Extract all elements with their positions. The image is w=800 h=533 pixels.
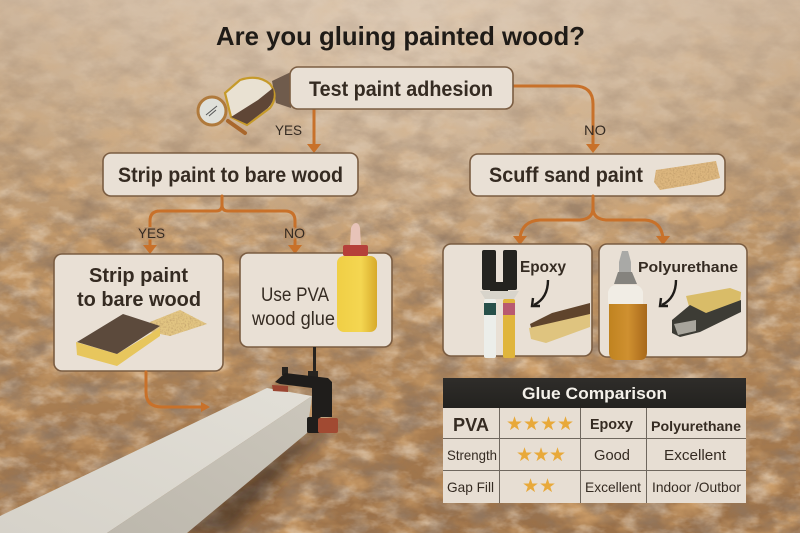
icon: magnifier and peeled paint swatch: [198, 72, 291, 133]
table header: Glue Comparison: [522, 384, 667, 403]
panel: epoxy: [443, 244, 592, 358]
panel: polyurethane: Polyurethane: [638, 259, 738, 276]
label: yes (strip): YES: [138, 225, 165, 241]
icon: curved pointer arrow: [532, 280, 548, 306]
row: gap fill: ★★: [522, 476, 556, 497]
label: no (test): NO: [584, 122, 606, 138]
panel: polyurethane: [599, 244, 747, 360]
row: gap fill: Excellent: [585, 479, 641, 495]
board: white painted wood: [0, 388, 312, 533]
table: glue comparison: [443, 378, 746, 503]
table header: [443, 378, 746, 408]
arrow: strip panel to board: [146, 372, 210, 412]
label: yes (test): YES: [275, 122, 302, 138]
box: test paint adhesion: [290, 67, 513, 109]
arrows: strip box to yes and no: [143, 196, 302, 254]
icon: curved pointer arrow: [660, 280, 676, 306]
panel: use PVA wood glue: [240, 223, 392, 347]
panel: strip paint with sanding block: Strip paint: [89, 265, 188, 287]
row: gap fill: Indoor /Outbor: [652, 479, 741, 495]
icon: sanding block and scraper: [672, 288, 741, 337]
icon: polyurethane bottle: [608, 251, 647, 360]
panel: use PVA wood glue: Use PVA: [261, 285, 329, 306]
shadow under board: [180, 425, 325, 533]
box: scuff sand paint: Scuff sand paint: [489, 164, 643, 187]
panel: use PVA wood glue: wood glue: [251, 309, 335, 330]
label: no (strip): NO: [284, 225, 305, 241]
icon: clamp: [272, 347, 338, 433]
row: strength: Excellent: [664, 448, 726, 464]
box: scuff sand paint: [470, 154, 725, 196]
row: PVA: ★★★★: [506, 414, 574, 435]
row: strength: Good: [594, 448, 630, 464]
row: PVA: Polyurethane: [651, 418, 741, 434]
row: strength: [447, 445, 726, 466]
row: PVA: Epoxy: [590, 416, 634, 433]
icon: sanded patch: [654, 161, 720, 190]
arrows: scuff box to epoxy and polyurethane: [513, 196, 670, 245]
arrow: test to no branch: [513, 86, 600, 153]
arrow: test to yes branch: [307, 109, 321, 153]
title: Are you gluing painted wood?: [216, 21, 585, 51]
icon: yellow glue bottle: [337, 223, 377, 332]
panel: strip paint with sanding block: to bare wood: [77, 289, 201, 311]
panel: strip paint with sanding block: [54, 254, 223, 371]
icon: sanding block: [76, 310, 207, 366]
row: PVA: [453, 414, 741, 435]
box: test paint adhesion: Test paint adhesion: [309, 78, 493, 101]
row: strength: ★★★: [516, 445, 566, 466]
panel: epoxy: Epoxy: [520, 259, 566, 276]
row: gap fill: [447, 476, 741, 497]
box: strip paint to bare wood: [103, 153, 358, 196]
icon: epoxy syringe: [480, 250, 519, 358]
box: strip paint to bare wood: Strip paint to bare wood: [118, 164, 343, 187]
row: strength: Strength: [447, 447, 497, 463]
row: gap fill: Gap Fill: [447, 479, 494, 495]
icon: epoxy wood sample: [529, 303, 590, 343]
row: PVA: PVA: [453, 415, 489, 435]
